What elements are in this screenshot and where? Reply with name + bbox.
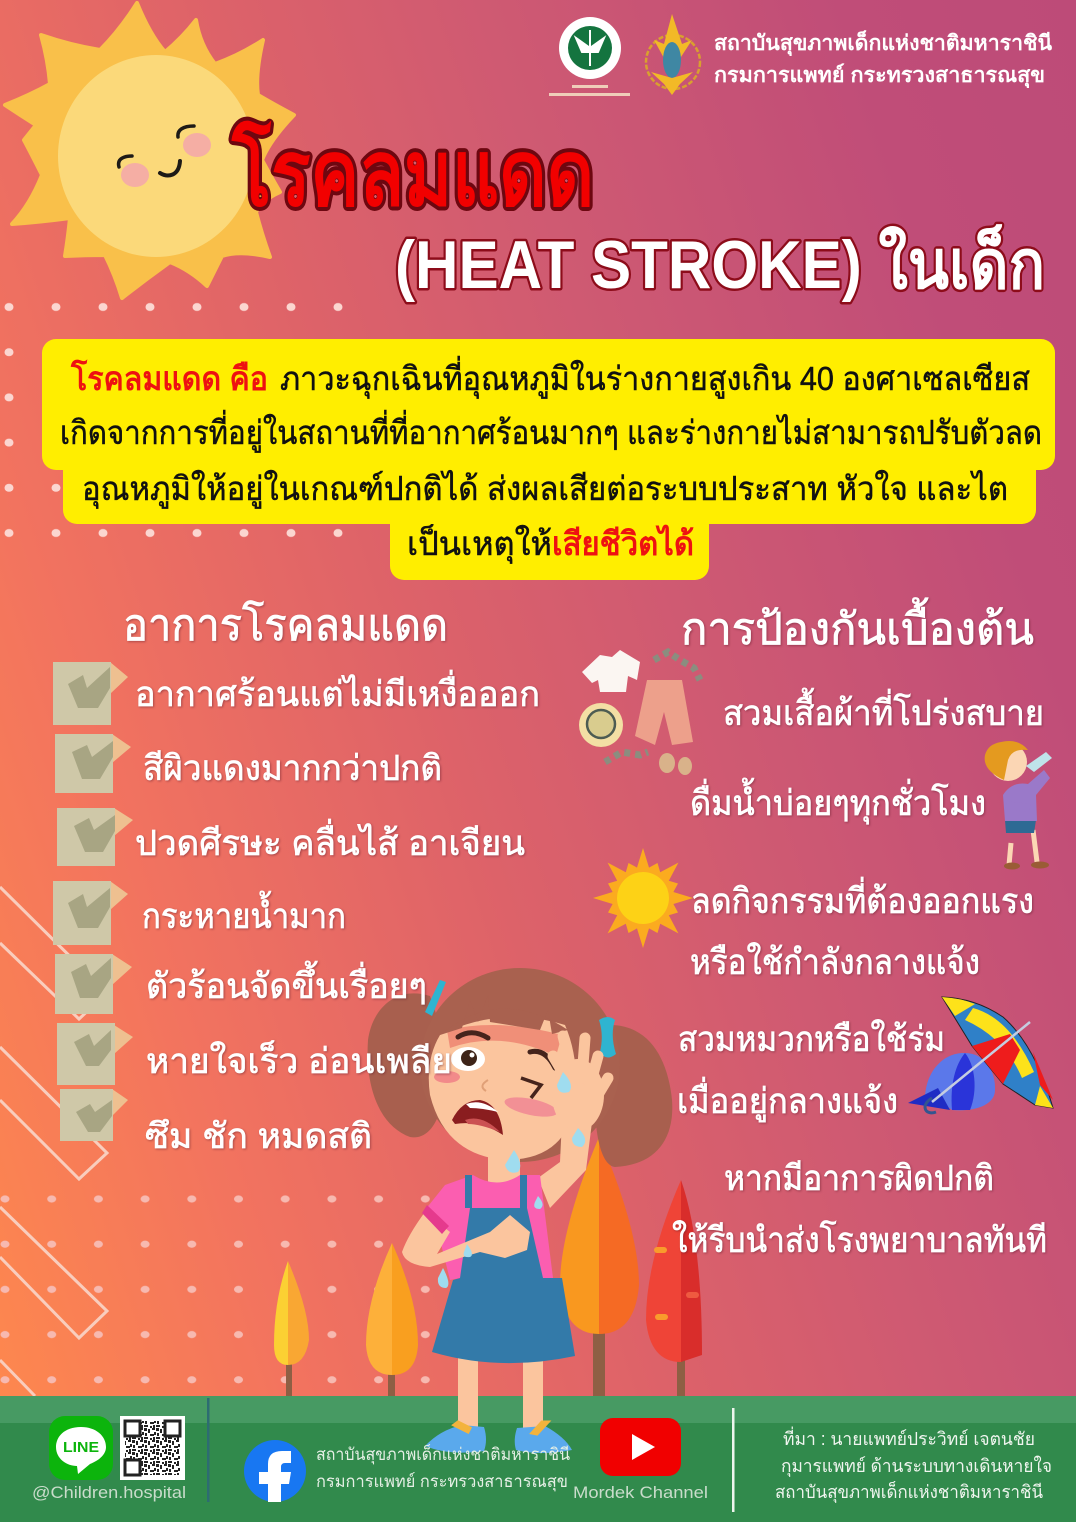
heading: prevention: การป้องกันเบื้องต้น — [681, 597, 1034, 654]
sweat drops — [438, 1072, 585, 1288]
hair clips — [425, 980, 616, 1058]
eyes and brows — [451, 1047, 485, 1071]
footer: source credit: กุมารแพทย์ ด้านระบบทางเดินหายใจ — [781, 1455, 1052, 1477]
panel: definition callout — [42, 339, 1055, 580]
footer: line contact: @Children.hospital — [32, 1483, 186, 1502]
logo: ministry of public health seal — [549, 17, 630, 96]
list: prevention: เมื่ออยู่กลางแจ้ง — [677, 1077, 898, 1122]
tree: small orange — [366, 1243, 418, 1396]
footer: line contact — [32, 1416, 186, 1502]
mouth — [452, 1100, 503, 1135]
shirt — [425, 1175, 553, 1280]
list: symptoms: สีผิวแดงมากกว่าปกติ — [143, 749, 442, 788]
footer: source credit: ที่มา : นายแพทย์ประวิทย์ เจตนชัย — [783, 1426, 1035, 1449]
panel: definition callout: เป็นเหตุให้ — [407, 524, 552, 564]
footer: youtube contact — [573, 1418, 708, 1502]
footer: source credit — [775, 1426, 1052, 1503]
illustration: sweating girl — [368, 968, 672, 1453]
tree: red — [646, 1180, 702, 1396]
ground and footer band — [0, 1396, 1076, 1522]
panel: definition callout: เสียชีวิตได้ — [552, 524, 694, 562]
list: prevention — [672, 687, 1047, 1260]
cheeks — [434, 1071, 460, 1083]
nose — [482, 1080, 488, 1091]
sunburn band — [447, 1025, 562, 1056]
list: symptoms: ซึม ชัก หมดสติ — [145, 1117, 372, 1156]
institute name — [714, 29, 1053, 89]
heading: symptoms: อาการโรคลมแดด — [123, 600, 448, 650]
footer: line contact: LINE — [63, 1439, 99, 1456]
panel: definition callout: โรคลมแดด คือ — [70, 359, 268, 397]
icon: small sun — [593, 848, 693, 948]
face — [429, 1017, 576, 1160]
tree: small yellow — [274, 1261, 309, 1396]
list: prevention: สวมหมวกหรือใช้ร่ม — [678, 1019, 945, 1059]
list: symptoms: ตัวร้อนจัดขึ้นเรื่อยๆ — [146, 960, 427, 1006]
hair top — [420, 968, 620, 1162]
list: prevention: ลดกิจกรรมที่ต้องออกแรง — [691, 877, 1034, 921]
panel: definition callout: ภาวะฉุกเฉินที่อุณหภูมิในร่างกายสูงเกิน 40 องศาเซลเซียส — [280, 356, 1030, 399]
list: prevention: หรือใช้กำลังกลางแจ้ง — [690, 942, 980, 982]
institute name: สถาบันสุขภาพเด็กแห่งชาติมหาราชินี — [714, 29, 1053, 57]
title: heat stroke in Thai: โรคลมแดด — [231, 120, 594, 225]
tree: large orange — [560, 1137, 639, 1396]
list: symptoms: กระหายน้ำมาก — [142, 890, 346, 936]
list: symptoms — [135, 670, 540, 1156]
list: prevention: ให้รีบนำส่งโรงพยาบาลทันที — [672, 1220, 1047, 1260]
list: symptoms: อากาศร้อนแต่ไม่มีเหงื่อออก — [135, 670, 540, 714]
icon: smiling sun — [5, 3, 294, 298]
shoes — [425, 1422, 572, 1453]
icon: clothes set — [579, 650, 700, 775]
logo: institute crest — [646, 14, 700, 95]
footer: facebook contact: สถาบันสุขภาพเด็กแห่งชาติมหาราชินี — [316, 1443, 570, 1465]
list: prevention: สวมเสื้อผ้าที่โปร่งสบาย — [723, 687, 1044, 733]
list: symptoms: หายใจเร็ว อ่อนเพลีย — [146, 1040, 452, 1081]
list: symptoms: ปวดศีรษะ คลื่นไส้ อาเจียน — [135, 819, 525, 863]
left arm — [402, 1212, 530, 1267]
dress skirt and bib — [432, 1208, 575, 1363]
icon: umbrella and cap — [908, 997, 1053, 1113]
bangs — [440, 995, 568, 1035]
institute name: กรมการแพทย์ กระทรวงสาธารณสุข — [714, 63, 1045, 89]
checkbox list icons — [53, 662, 133, 1141]
hair pigtails — [368, 993, 672, 1167]
icon: boy drinking water — [985, 741, 1052, 870]
footer: youtube contact: Mordek Channel — [573, 1483, 708, 1502]
neck and legs — [458, 1150, 543, 1432]
list: prevention: ดื่มน้ำบ่อยๆทุกชั่วโมง — [690, 777, 986, 824]
footer: facebook contact — [244, 1440, 570, 1502]
list: prevention: หากมีอาการผิดปกติ — [724, 1159, 994, 1198]
panel: definition callout: อุณหภูมิให้อยู่ในเกณฑ์ปกติได้ ส่งผลเสียต่อระบบประสาท หัวใจ และไต — [82, 470, 1008, 509]
right arm and hand — [538, 1036, 608, 1208]
footer: source credit: สถาบันสุขภาพเด็กแห่งชาติมหาราชินี — [775, 1480, 1043, 1503]
footer: facebook contact: กรมการแพทย์ กระทรวงสาธารณสุข — [316, 1472, 568, 1492]
